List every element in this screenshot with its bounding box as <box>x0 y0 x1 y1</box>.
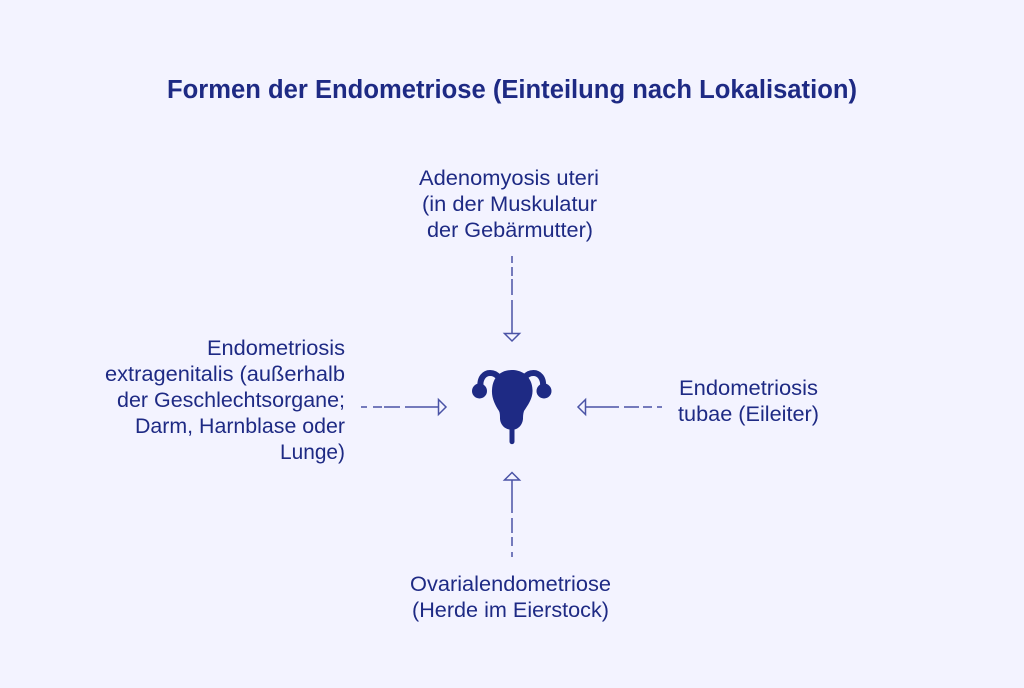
label: left, Endometriosis extragenitalis: Lunge) <box>280 440 345 464</box>
label: left, Endometriosis extragenitalis: Darm, Harnblase oder <box>135 414 345 438</box>
label: left, Endometriosis extragenitalis: Endometriosis <box>207 336 345 360</box>
arrow: right <box>578 400 662 414</box>
icon: uterus <box>472 370 552 444</box>
label: top, Adenomyosis uteri: (in der Muskulatur <box>422 192 597 216</box>
label: top, Adenomyosis uteri <box>419 166 599 242</box>
label: top, Adenomyosis uteri: Adenomyosis uteri <box>419 166 599 190</box>
arrow: bottom <box>504 472 520 557</box>
label: left, Endometriosis extragenitalis <box>105 336 345 464</box>
label: left, Endometriosis extragenitalis: der Geschlechtsorgane; <box>117 388 345 412</box>
arrow: left <box>361 400 446 414</box>
label: bottom, Ovarialendometriose <box>410 572 611 622</box>
label: bottom, Ovarialendometriose: (Herde im Eierstock) <box>412 598 609 622</box>
label: right, Endometriosis tubae: Endometriosis <box>679 376 818 400</box>
arrow: top <box>504 256 520 341</box>
label: bottom, Ovarialendometriose: Ovarialendometriose <box>410 572 611 596</box>
label: top, Adenomyosis uteri: der Gebärmutter) <box>427 218 593 242</box>
title: Formen der Endometriose (Einteilung nach Lokalisation) <box>167 76 857 104</box>
label: left, Endometriosis extragenitalis: extragenitalis (außerhalb <box>105 362 345 386</box>
label: right, Endometriosis tubae <box>678 376 819 426</box>
label: right, Endometriosis tubae: tubae (Eileiter) <box>678 402 819 426</box>
